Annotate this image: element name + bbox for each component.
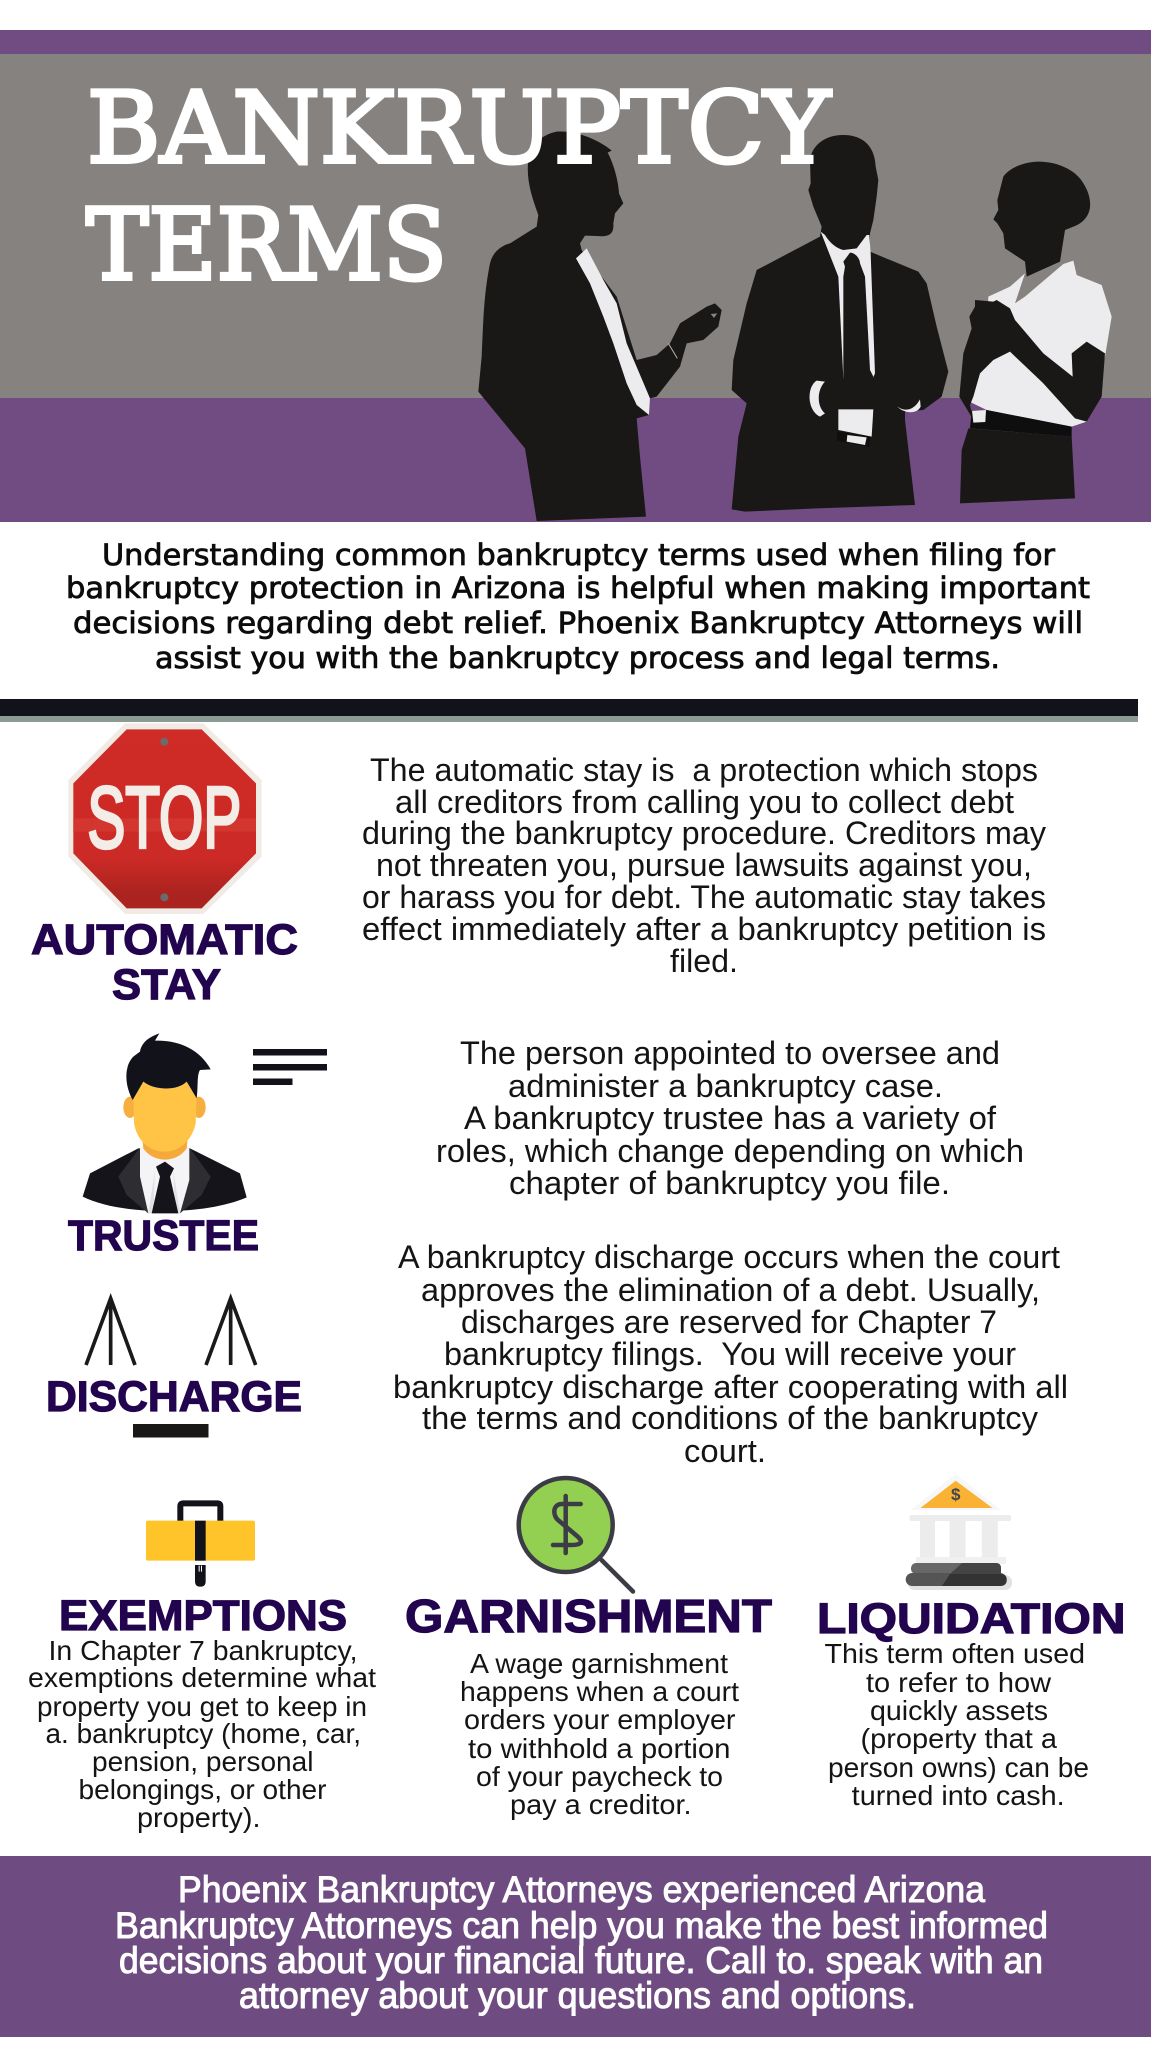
text block: discharge: the terms and conditions of the bankruptcy (422, 1400, 1038, 1436)
panel: call to action footer: decisions about your financial future. Call to. speak with an (119, 1940, 1043, 1981)
icon: magnifying glass with dollar (519, 1478, 633, 1592)
text block: discharge: bankruptcy discharge after cooperating with all (393, 1369, 1068, 1405)
text block: trustee: administer a bankruptcy case. (508, 1068, 943, 1104)
column: garnishment (405, 1478, 772, 1820)
heading: automatic stay: AUTOMATIC (31, 916, 298, 964)
text block: discharge: A bankruptcy discharge occurs when the court (398, 1239, 1060, 1275)
text block: liquidation (824, 1638, 1089, 1811)
heading: automatic stay (31, 916, 298, 1009)
heading: automatic stay: STAY (112, 961, 221, 1009)
text block: trustee (436, 1035, 1024, 1201)
icon: discharge arrows (86, 1298, 256, 1365)
section: discharge (46, 1239, 1068, 1469)
icon: trustee portrait (83, 1033, 247, 1213)
text block: exemptions: In Chapter 7 bankruptcy, (48, 1635, 358, 1666)
panel: header banner (0, 30, 1151, 522)
text block: trustee: chapter of bankruptcy you file. (509, 1165, 950, 1201)
heading: garnishment: GARNISHMENT (405, 1590, 772, 1642)
text block: garnishment: A wage garnishment (470, 1648, 728, 1679)
silhouette: woman in white blouse (959, 162, 1112, 503)
text block: garnishment: pay a creditor. (510, 1789, 692, 1820)
text block: garnishment: to withhold a portion (468, 1733, 730, 1764)
icon: bank building (906, 1474, 1012, 1590)
text block: garnishment: of your paycheck to (476, 1761, 723, 1792)
icon: text lines (253, 1049, 327, 1085)
panel: call to action footer: Phoenix Bankruptcy Attorneys experienced Arizona (178, 1869, 985, 1910)
text block: automatic stay: effect immediately after a bankruptcy petition is (362, 911, 1046, 947)
divider bar (0, 699, 1138, 722)
text block: exemptions: pension, personal (92, 1746, 314, 1777)
title (86, 72, 831, 303)
section: trustee (68, 1033, 1024, 1260)
section: automatic stay (31, 723, 1046, 1009)
text block: exemptions: belongings, or other (78, 1774, 326, 1805)
text block: liquidation: (property that a (860, 1723, 1057, 1754)
text block: automatic stay: or harass you for debt. The automatic stay takes (362, 879, 1046, 915)
title: BANKRUPTCY (87, 72, 831, 186)
text block: automatic stay: The automatic stay is a protection which stops (370, 752, 1038, 788)
text block: automatic stay (362, 752, 1046, 979)
text block: introduction: bankruptcy protection in Arizona is helpful when making important (66, 571, 1090, 605)
panel: call to action footer: Bankruptcy Attorneys can help you make the best informed (115, 1905, 1048, 1946)
heading: liquidation: LIQUIDATION (817, 1595, 1126, 1643)
icon: bank building: $ (951, 1485, 961, 1504)
text block: garnishment: orders your employer (464, 1704, 736, 1735)
icon: stop sign: STOP (87, 768, 241, 866)
text block: exemptions: exemptions determine what (28, 1662, 376, 1693)
panel: call to action footer (0, 1856, 1151, 2037)
text block: liquidation: This term often used (824, 1638, 1085, 1669)
icon: discharge bar (133, 1424, 208, 1438)
text block: exemptions: property you get to keep in (37, 1691, 367, 1722)
text block: introduction: decisions regarding debt relief. Phoenix Bankruptcy Attorneys will (73, 606, 1083, 640)
text block: introduction: Understanding common bankruptcy terms used when filing for (102, 538, 1055, 572)
text block: discharge: court. (684, 1433, 766, 1469)
panel: call to action footer: attorney about your questions and options. (239, 1975, 916, 2016)
text block: introduction (66, 538, 1090, 675)
text block: automatic stay: not threaten you, pursue lawsuits against you, (376, 847, 1032, 883)
text block: garnishment (460, 1648, 739, 1820)
text block: liquidation: turned into cash. (852, 1780, 1065, 1811)
icon: stop sign (68, 723, 262, 914)
text block: automatic stay: during the bankruptcy procedure. Creditors may (362, 815, 1046, 851)
text block: discharge: bankruptcy filings. You will receive your (444, 1336, 1016, 1372)
text block: discharge: approves the elimination of a debt. Usually, (421, 1272, 1040, 1308)
silhouette: man with white tie (478, 132, 722, 521)
column: liquidation (817, 1474, 1126, 1811)
text block: liquidation: to refer to how (866, 1667, 1052, 1698)
text block: automatic stay: filed. (670, 943, 738, 979)
heading: exemptions: EXEMPTIONS (59, 1592, 347, 1640)
text block: liquidation: person owns) can be (828, 1752, 1089, 1783)
text block: liquidation: quickly assets (870, 1695, 1048, 1726)
heading: discharge: DISCHARGE (46, 1373, 302, 1421)
column: exemptions (28, 1503, 376, 1833)
icon: briefcase (146, 1503, 255, 1587)
text block: discharge: discharges are reserved for Chapter 7 (461, 1304, 997, 1340)
text block: exemptions (28, 1635, 376, 1833)
text block: introduction: assist you with the bankruptcy process and legal terms. (155, 641, 1000, 675)
text block: trustee: The person appointed to oversee and (460, 1035, 1000, 1071)
text block: exemptions: a. bankruptcy (home, car, (46, 1718, 361, 1749)
title: TERMS (86, 189, 447, 303)
text block: trustee: A bankruptcy trustee has a variety of (464, 1100, 996, 1136)
text block: garnishment: happens when a court (460, 1676, 739, 1707)
text block: discharge (393, 1239, 1068, 1469)
text block: trustee: roles, which change depending on which (436, 1133, 1024, 1169)
illustration: three business silhouettes (478, 132, 1112, 521)
text block: automatic stay: all creditors from calling you to collect debt (395, 784, 1014, 820)
text block: exemptions: property). (137, 1802, 260, 1833)
heading: trustee: TRUSTEE (68, 1212, 259, 1260)
silhouette: man in suit with black tie (732, 135, 948, 512)
